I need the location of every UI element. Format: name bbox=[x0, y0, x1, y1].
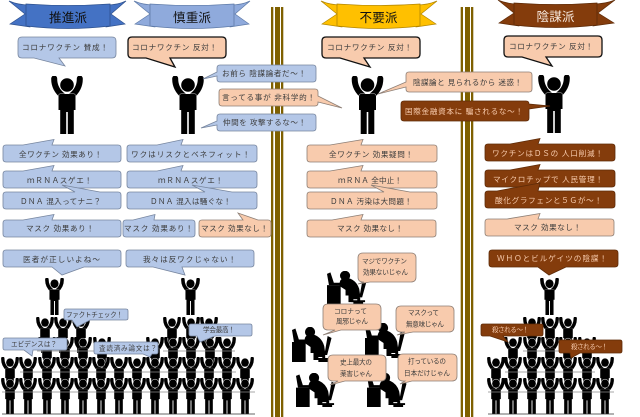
icon: desk worker top bbox=[327, 271, 367, 304]
callout: 査読済み論文: 査読済み論文は？ bbox=[99, 344, 157, 352]
icon: desk worker middle left bbox=[292, 327, 332, 362]
comment: マスクって無意味 bbox=[396, 306, 454, 335]
slogan: 全ワクチン効果疑問: 全ワクチン 効果疑問！ bbox=[329, 149, 413, 159]
callout: ファクトチェック bbox=[64, 309, 128, 327]
slogan: マイクロチップ bbox=[485, 164, 615, 187]
slogan: DSの人口削減: ワクチンはＤＳの 人口削減！ bbox=[492, 148, 603, 158]
slogan: mRNA全中止 bbox=[307, 166, 437, 188]
slogan: 酸化グラフェン bbox=[485, 183, 615, 208]
slogan: 医者が正しい: 医者が正しいよね～ bbox=[23, 254, 100, 264]
callout: 非科学的 bbox=[219, 89, 342, 108]
comment: 史上最大の薬害: 史上最大の bbox=[340, 358, 372, 366]
comment: マジでワクチン: マジでワクチン bbox=[362, 258, 407, 266]
icon: desk worker middle right bbox=[365, 323, 405, 358]
callout: 非科学的: 言ってる事が 非科学的！ bbox=[222, 92, 315, 102]
callout: ファクトチェック: ファクトチェック！ bbox=[66, 311, 123, 319]
slogan: 我々は反ワクじゃない: 我々は反ワクじゃない！ bbox=[143, 254, 236, 264]
comment: 打っているの日本だけ bbox=[398, 354, 457, 384]
slogan: マスク効果なし 陰謀派 bbox=[485, 214, 614, 236]
slogan: ワクはリスクとベネフィット: ワクはリスクとベネフィット！ bbox=[131, 150, 250, 159]
icon: desk worker bottom right bbox=[367, 373, 407, 407]
banner: 慎重派 bbox=[134, 1, 250, 28]
speech: 慎重派 反対 bbox=[128, 37, 226, 67]
callout: 殺される 2: 殺される～！ bbox=[571, 342, 608, 351]
slogan: マスク効果あり 慎重派: マスク 効果あり！ bbox=[124, 223, 193, 233]
slogan: 酸化グラフェン: 酸化グラフェンと５Ｇが～！ bbox=[495, 195, 602, 205]
banner: 推進派: 推進派 bbox=[49, 11, 87, 25]
slogan: マスク効果なし 慎重派 bbox=[199, 213, 271, 237]
callout: 殺される 1: 殺される～！ bbox=[492, 325, 529, 334]
slogan: DNA汚染は大問題: ＤＮＡ 汚染は大問題！ bbox=[330, 196, 412, 206]
slogan: 全ワクチン効果あり bbox=[3, 140, 121, 162]
callout: 国際金融資本: 国際金融資本に 騙されるな～！ bbox=[405, 106, 523, 116]
slogan: マスク効果なし 陰謀派: マスク 効果なし！ bbox=[514, 222, 581, 232]
slogan: WHOとビルゲイツ: ＷＨＯとビルゲイツの陰謀！ bbox=[497, 254, 607, 263]
slogan: DNA混入は騒ぐな: ＤＮＡ 混入は騒ぐな！ bbox=[150, 197, 231, 206]
callout: 学会最高: 学会最高！ bbox=[203, 325, 235, 334]
callout: 殺される 1 bbox=[481, 324, 543, 342]
banner: 不要派 bbox=[321, 1, 437, 28]
person: 慎重派 leader bbox=[175, 78, 201, 134]
comment: 史上最大の薬害: 薬害じゃん bbox=[340, 369, 372, 378]
banner: 慎重派: 慎重派 bbox=[173, 10, 211, 25]
slogan: マスク効果あり: マスク 効果あり！ bbox=[26, 223, 94, 233]
comment: マスクって無意味: 無意味じゃん bbox=[406, 320, 444, 328]
speech: 推進派 賛成: コロナワクチン 賛成！ bbox=[22, 42, 108, 52]
speech: 慎重派 反対: コロナワクチン 反対！ bbox=[132, 42, 217, 52]
person: 陰謀派 top bbox=[542, 279, 557, 315]
slogan: マスク効果あり 慎重派 bbox=[123, 214, 195, 237]
callout: 仲間を攻撃: 仲間を 攻撃するな～！ bbox=[223, 117, 306, 127]
slogan: DNA混入は騒ぐな bbox=[127, 185, 257, 209]
slogan: マイクロチップ: マイクロチップで 人民管理！ bbox=[493, 174, 603, 184]
speech: 不要派 反対: コロナワクチン 反対！ bbox=[327, 42, 412, 52]
slogan: ワクはリスクとベネフィット bbox=[127, 140, 257, 162]
banner: 不要派: 不要派 bbox=[360, 11, 398, 25]
slogan: mRNAスゲエ 慎重派: ｍＲＮＡスゲエ！ bbox=[158, 176, 223, 185]
person: 陰謀派 leader bbox=[541, 77, 567, 133]
comment: 打っているの日本だけ: 打っているの bbox=[408, 356, 446, 366]
slogan: mRNAスゲエ bbox=[3, 166, 121, 188]
divider pole left bbox=[271, 7, 283, 417]
slogan: mRNAスゲエ 慎重派 bbox=[127, 166, 257, 188]
banner: 陰謀派: 陰謀派 bbox=[536, 10, 575, 24]
slogan: 医者が正しい bbox=[3, 250, 121, 275]
person: 推進派 leader bbox=[54, 78, 80, 134]
comment: マジでワクチン bbox=[358, 253, 416, 284]
speech: 不要派 反対 bbox=[322, 37, 420, 67]
divider pole right bbox=[461, 7, 473, 417]
slogan: DSの人口削減 bbox=[485, 138, 615, 161]
speech: 陰謀派 反対: コロナワクチン 反対！ bbox=[509, 41, 593, 51]
person: 推進派 top bbox=[47, 279, 62, 315]
crowd: 推進派 + 慎重派 bbox=[2, 318, 255, 414]
icon: desk worker bottom left bbox=[296, 373, 336, 407]
person: 慎重派 top bbox=[183, 279, 198, 315]
slogan: WHOとビルゲイツ bbox=[489, 250, 618, 275]
speech: 推進派 賛成 bbox=[18, 37, 116, 66]
person: 不要派 leader bbox=[355, 78, 380, 134]
comment: コロナって風邪: コロナって bbox=[334, 308, 367, 316]
slogan: DNA混入ってナニ bbox=[3, 185, 121, 209]
callout: 査読済み論文 bbox=[94, 342, 158, 357]
slogan: mRNA全中止: ｍＲＮＡ 全中止！ bbox=[338, 175, 402, 185]
callout: 殺される 2 bbox=[559, 340, 622, 358]
comment: コロナって風邪 bbox=[323, 304, 381, 335]
slogan: マスク効果なし 不要派 bbox=[307, 214, 436, 237]
callout: 陰謀論者: お前ら 陰謀論者だ～！ bbox=[222, 68, 306, 78]
callout: 陰謀論者 bbox=[203, 65, 316, 82]
slogan: 我々は反ワクじゃない bbox=[126, 250, 254, 275]
slogan: 全ワクチン効果疑問 bbox=[307, 140, 437, 162]
callout: 学会最高 bbox=[189, 324, 252, 342]
slogan: マスク効果なし 不要派: マスク 効果なし！ bbox=[337, 223, 403, 233]
callout: 仲間を攻撃 bbox=[201, 114, 316, 131]
comment: 史上最大の薬害 bbox=[328, 355, 386, 385]
slogan: DNA汚染は大問題 bbox=[307, 185, 437, 209]
slogan: マスク効果なし 慎重派: マスク 効果なし！ bbox=[201, 223, 268, 233]
comment: 打っているの日本だけ: 日本だけじゃん bbox=[404, 368, 450, 378]
callout: エビデンスは: エビデンスは？ bbox=[11, 340, 57, 348]
slogan: マスク効果あり bbox=[3, 214, 121, 237]
comment: マスクって無意味: マスクって bbox=[408, 309, 439, 317]
slogan: 全ワクチン効果あり: 全ワクチン 効果あり！ bbox=[19, 149, 102, 159]
callout: 国際金融資本 bbox=[401, 101, 550, 121]
banner: 推進派 bbox=[9, 1, 126, 28]
banner: 陰謀派 bbox=[498, 0, 615, 28]
comment: コロナって風邪: 風邪じゃん bbox=[336, 318, 368, 326]
slogan: DNA混入ってナニ: ＤＮＡ 混入ってナニ？ bbox=[20, 197, 101, 206]
comment: マジでワクチン: 効果ないじゃん bbox=[363, 268, 408, 276]
callout: 陰謀論と見られる bbox=[378, 72, 532, 94]
callout: 陰謀論と見られる: 陰謀論と 見られるから 迷惑！ bbox=[413, 77, 522, 87]
crowd: 陰謀派 bbox=[488, 318, 614, 414]
speech: 陰謀派 反対 bbox=[504, 36, 602, 66]
callout: エビデンスは bbox=[3, 338, 67, 356]
slogan: mRNAスゲエ: ｍＲＮＡスゲエ！ bbox=[27, 176, 92, 185]
